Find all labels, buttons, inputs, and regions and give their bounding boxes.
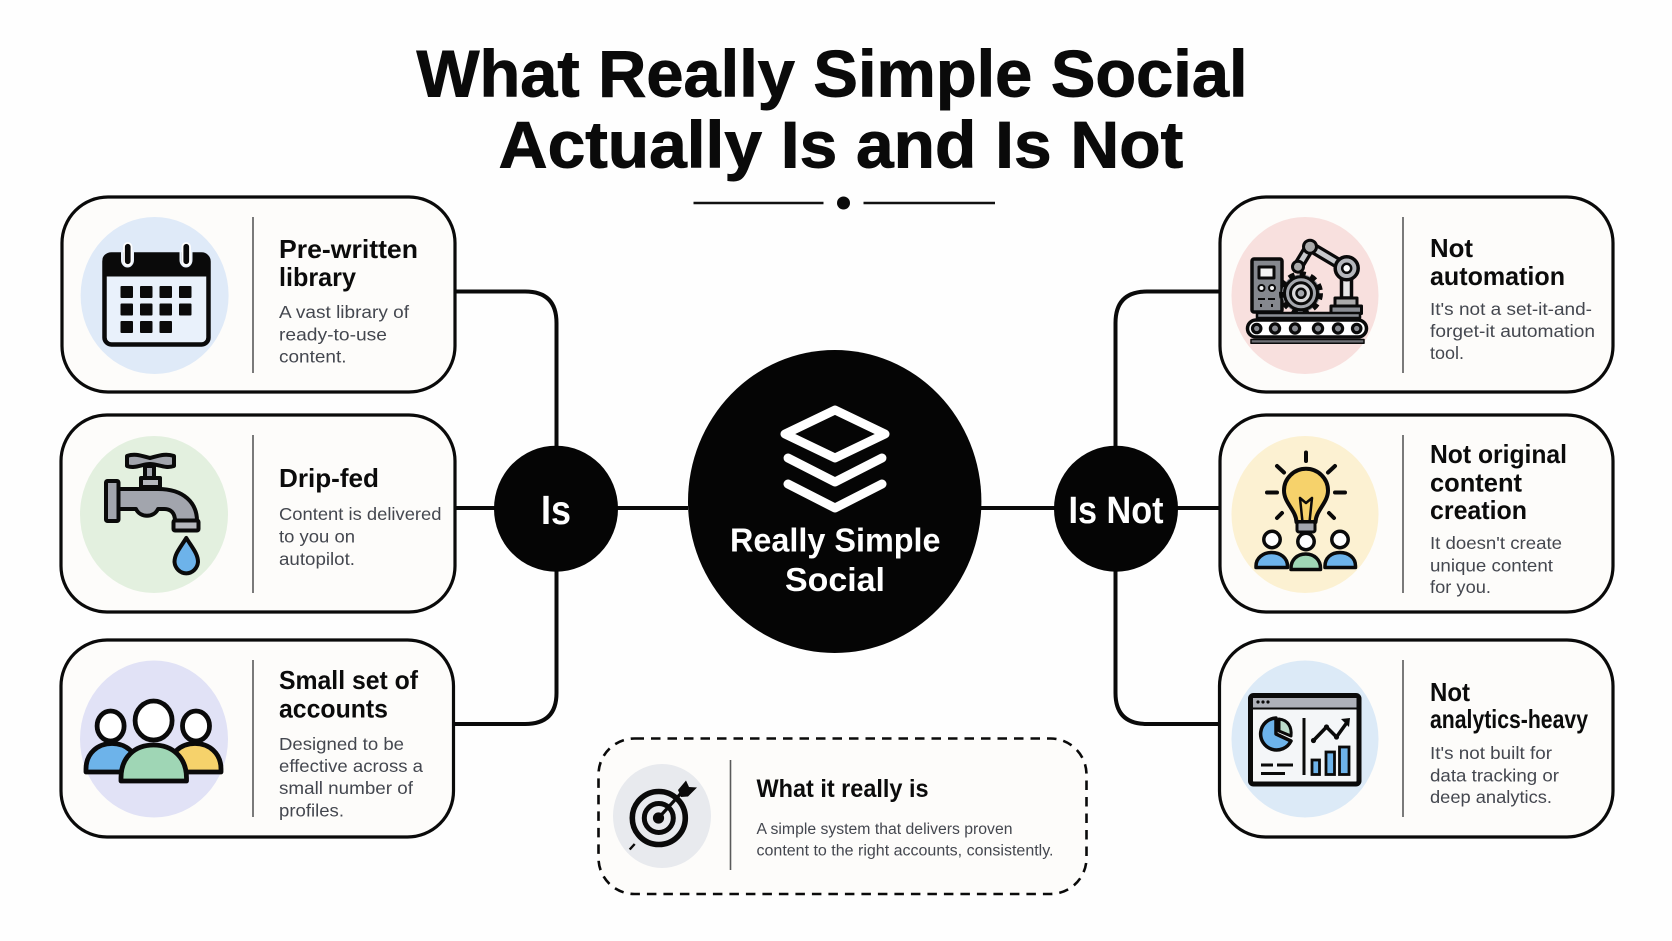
heading: pre-written library: Pre-written — [279, 234, 418, 264]
title: What Really Simple Social — [416, 37, 1248, 111]
icon: analytics dashboard — [1232, 660, 1378, 818]
connectors: Is branch — [455, 292, 688, 724]
icon: light bulb and team — [1232, 436, 1378, 593]
node: Really Simple Social hub — [688, 350, 981, 653]
heading: small set of accounts: Small set of — [279, 665, 418, 695]
heading: not automation: Not — [1430, 233, 1473, 263]
text: not analytics description: data tracking or — [1430, 766, 1559, 786]
hub label: Social — [785, 561, 885, 598]
icon: robotic assembly line — [1232, 217, 1378, 374]
text: what it really is description: A simple system that delivers proven — [756, 821, 1012, 838]
icon: group of people — [80, 660, 228, 818]
text: not automation description: It's not a set-it-and- — [1430, 299, 1592, 319]
heading: not original content creation: creation — [1430, 495, 1527, 525]
heading: not automation: automation — [1430, 261, 1565, 291]
node: Is Not — [1054, 446, 1178, 572]
heading: not analytics-heavy — [1430, 677, 1588, 734]
heading: not original content creation: Not original — [1430, 439, 1567, 469]
connectors: Is Not branch — [981, 292, 1220, 724]
text: not automation description — [1430, 299, 1595, 363]
text: drip-fed description: to you on — [279, 526, 355, 546]
text: small set description — [279, 734, 423, 820]
panel: not analytics-heavy — [1220, 640, 1613, 837]
hub label: Really Simple — [730, 522, 940, 559]
text: small set description: effective across a — [279, 756, 423, 776]
panel: pre-written library — [62, 197, 455, 392]
text: not original description: unique content — [1430, 556, 1553, 576]
node: Is: Is — [541, 487, 571, 533]
text: not analytics description: It's not built for — [1430, 743, 1552, 763]
heading: not analytics-heavy: Not — [1430, 677, 1470, 707]
heading: small set of accounts — [279, 665, 418, 724]
text: what it really is description — [756, 821, 1054, 860]
icon: target with arrow — [613, 764, 711, 868]
heading: not original content creation — [1430, 439, 1567, 525]
text: small set description: profiles. — [279, 800, 344, 820]
text: pre-written description: content. — [279, 346, 346, 366]
text: pre-written description: A vast library of — [279, 302, 409, 322]
text: not original description: It doesn't create — [1430, 533, 1562, 553]
text: not original description — [1430, 533, 1562, 597]
text: drip-fed description: Content is delivered — [279, 504, 442, 524]
panel: drip-fed — [61, 415, 455, 612]
node: Is — [494, 446, 618, 572]
title divider ornament — [694, 196, 995, 210]
heading: pre-written library — [279, 234, 418, 292]
text: not automation description: forget-it automation — [1430, 321, 1595, 341]
heading: not analytics-heavy: analytics-heavy — [1430, 704, 1588, 734]
text: pre-written description — [279, 302, 409, 366]
title: Actually Is and Is Not — [499, 107, 1183, 181]
text: not analytics description: deep analytics. — [1430, 787, 1552, 807]
text: not automation description: tool. — [1430, 343, 1464, 363]
text: what it really is description: content to the right accounts, consistently. — [756, 842, 1054, 860]
heading: pre-written library: library — [279, 262, 357, 292]
icon: stacked layers — [785, 410, 885, 508]
heading: drip-fed: Drip-fed — [279, 463, 379, 493]
panel: small set of accounts — [61, 640, 454, 837]
panel: not original content creation — [1220, 415, 1613, 612]
icon: faucet — [80, 436, 228, 593]
text: pre-written description: ready-to-use — [279, 324, 387, 344]
icon: calendar — [81, 217, 229, 374]
heading: small set of accounts: accounts — [279, 694, 388, 724]
node: Is Not: Is Not — [1068, 490, 1164, 532]
text: small set description: Designed to be — [279, 734, 404, 754]
text: drip-fed description — [279, 504, 442, 569]
callout: what it really is — [598, 738, 1086, 894]
text: drip-fed description: autopilot. — [279, 549, 355, 569]
text: not original description: for you. — [1430, 577, 1491, 597]
heading: what it really is: What it really is — [756, 775, 928, 803]
heading: not original content creation: content — [1430, 468, 1522, 498]
panel: not automation — [1220, 197, 1613, 392]
text: small set description: small number of — [279, 778, 413, 798]
title — [416, 37, 1248, 181]
text: not analytics description — [1430, 743, 1559, 807]
heading: not automation — [1430, 233, 1565, 291]
hub label — [730, 522, 940, 598]
